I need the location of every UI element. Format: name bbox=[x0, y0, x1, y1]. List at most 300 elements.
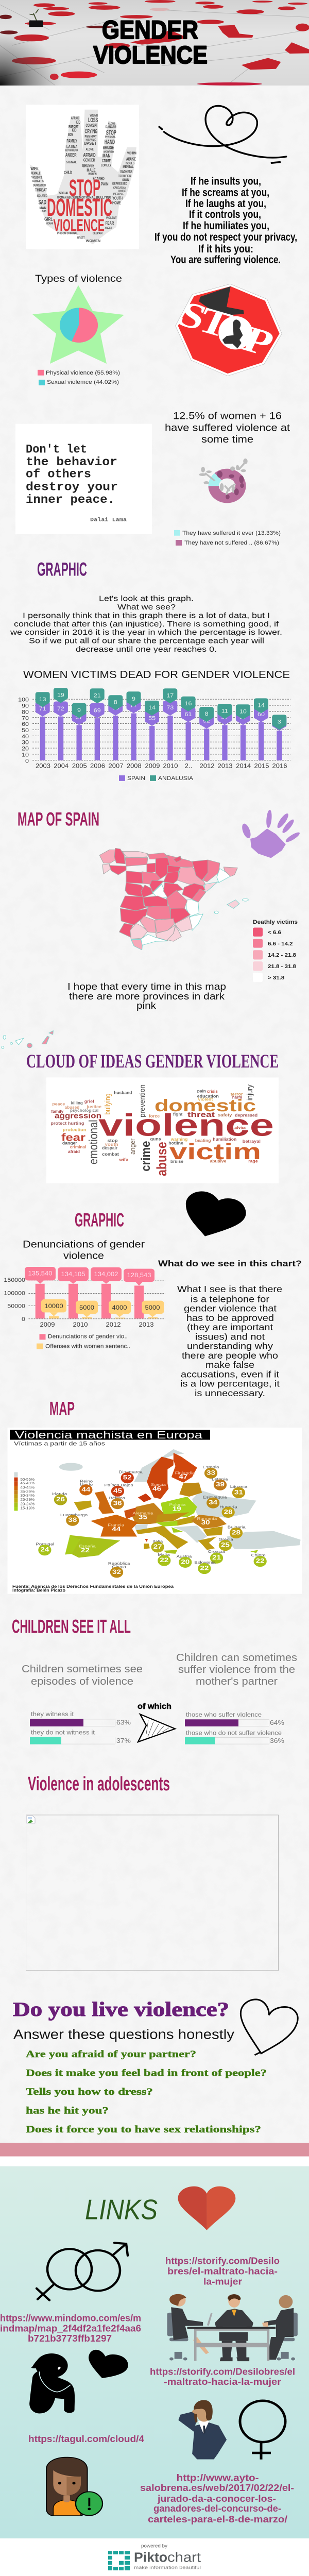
grid and y axis: 90 bbox=[22, 702, 29, 709]
chart title: violence bbox=[63, 1250, 104, 1261]
panel: women victims chart bbox=[18, 669, 290, 782]
panel: stop domestic violence hand word cloud: GIRL bbox=[44, 217, 53, 222]
country labels and value bubbles: Eslovaquia bbox=[203, 1495, 227, 1499]
panel: stop domestic violence hand word cloud: ABUSE bbox=[126, 157, 136, 162]
panel: word cloud: peace bbox=[52, 1101, 65, 1106]
text block: children see bbox=[22, 1664, 143, 1687]
link: mindomo bbox=[0, 2313, 141, 2344]
Andalusia values bbox=[39, 691, 281, 725]
icon: stop sign with boot and kneeling figure: S bbox=[172, 294, 213, 338]
panel: stop domestic violence hand word cloud: VICTIM bbox=[127, 150, 136, 155]
panel: stop domestic violence hand word cloud: WOMEN bbox=[85, 240, 100, 243]
panel: word cloud: abuse bbox=[154, 1142, 169, 1176]
panel: Europe violence map: Grecia bbox=[219, 1537, 233, 1541]
grid and y axis: 50000 bbox=[7, 1302, 25, 1309]
panel: stop domestic violence hand word cloud: FEMALE bbox=[31, 171, 41, 175]
x axis labels: 2012 bbox=[106, 1321, 121, 1328]
panel: word cloud: psychological bbox=[70, 1108, 98, 1113]
panel: stop domestic violence hand word cloud: ANGER bbox=[105, 226, 112, 230]
question list: Does it force you to have sex relationships? bbox=[26, 2124, 261, 2135]
panel: stop domestic violence hand word cloud: KID bbox=[76, 120, 80, 125]
link: mindomo: indmap/map_2f4df2a1fe2f4aa6 bbox=[0, 2324, 141, 2334]
panel: stop domestic violence hand word cloud: VIOLENT bbox=[106, 216, 117, 220]
pink divider band bbox=[0, 2143, 309, 2157]
panel: stop domestic violence hand word cloud: SADNESS bbox=[120, 170, 132, 175]
panel: word cloud: afraid bbox=[68, 1149, 80, 1154]
text block: map hope: I hope that every time in this map bbox=[67, 981, 226, 992]
panel: word cloud: grief bbox=[84, 1099, 95, 1104]
offense values bbox=[44, 1303, 160, 1311]
panel: stop domestic violence hand word cloud: DESPAIR bbox=[93, 232, 102, 235]
grid and y axis: 10 bbox=[22, 751, 29, 758]
panel: stop domestic violence hand word cloud: GENDER bbox=[83, 158, 95, 163]
panel: Europe violence map: 38 bbox=[68, 1516, 77, 1523]
panel: word cloud: victim bbox=[169, 1139, 261, 1164]
panel: stop domestic violence hand word cloud: WOMEN bbox=[88, 172, 97, 176]
panel: word cloud: violent bbox=[198, 1097, 213, 1101]
panel: stop domestic violence hand word cloud: YOUNG bbox=[90, 113, 98, 117]
grid and y axis: 150000 bbox=[4, 1277, 25, 1283]
legend: ANDALUSIA bbox=[158, 775, 193, 782]
panel: word cloud: justice bbox=[86, 1105, 101, 1109]
legend scale: 45-49% bbox=[20, 1481, 35, 1485]
map legend: deathly victims: 6.6 - 14.2 bbox=[268, 941, 293, 947]
panel: word cloud bbox=[46, 1077, 279, 1183]
icon: red heart bbox=[178, 2187, 235, 2230]
link: tagul: https://tagul.com/cloud/4 bbox=[28, 2434, 144, 2445]
Spain bars bbox=[36, 698, 286, 760]
panel: Europe violence map: 30 bbox=[201, 1518, 210, 1526]
panel: Europe violence map: 44 bbox=[112, 1525, 121, 1532]
map legend: deathly victims: 21.8 - 31.8 bbox=[268, 963, 296, 970]
panel: stop domestic violence hand word cloud: SOCIAL bbox=[59, 191, 69, 195]
map source: Infografía: Belén Picazo bbox=[12, 1588, 65, 1593]
panel: word cloud: anger bbox=[129, 1139, 136, 1155]
country labels and value bubbles: 52 bbox=[123, 1473, 132, 1481]
x axis labels: 2004 bbox=[54, 762, 68, 769]
panel: stop domestic violence hand word cloud: ALONE bbox=[85, 147, 94, 151]
Europe countries bbox=[59, 1449, 301, 1558]
title: Gender Violence: VIOLENCE bbox=[93, 41, 208, 69]
link: storify two bbox=[150, 2367, 295, 2387]
heading: what do we see: What do we see in this chart? bbox=[158, 1259, 302, 1268]
icon: stop sign with boot and kneeling figure: P bbox=[236, 319, 280, 364]
panel: stop domestic violence hand word cloud: VIOLENCE bbox=[31, 175, 42, 179]
grid and y axis: 70 bbox=[22, 715, 29, 721]
Balearic Islands bbox=[214, 899, 248, 914]
x axis labels: 2013 bbox=[139, 1321, 154, 1328]
panel: stop domestic violence hand word cloud: PRISON CRIMINAL bbox=[57, 232, 78, 235]
Spain values: 61 bbox=[185, 711, 192, 718]
panel: word cloud: fear bbox=[61, 1132, 85, 1143]
icon: black heart bbox=[186, 1191, 246, 1236]
icon: black heart small bbox=[89, 2350, 128, 2378]
grid and y axis: 100000 bbox=[4, 1290, 25, 1297]
panel: Europe violence map bbox=[7, 1428, 302, 1594]
panel: donut chart with branches bbox=[174, 459, 281, 546]
denunciation values: 128,543 bbox=[127, 1272, 151, 1279]
x axis labels: 2012 bbox=[200, 762, 215, 769]
panel: stop domestic violence hand word cloud: GRUNGE bbox=[82, 164, 94, 168]
Andalusia values: 14 bbox=[258, 702, 265, 709]
x axis labels: 2009 bbox=[40, 1321, 55, 1328]
panel: stop domestic violence hand word cloud bbox=[26, 105, 139, 249]
Spain values: 55 bbox=[148, 715, 156, 721]
panel: stop domestic violence hand word cloud: CHINESE bbox=[118, 190, 126, 193]
panel: stop domestic violence hand word cloud: ALONE bbox=[108, 122, 115, 125]
map legend: deathly victims: < 6.6 bbox=[268, 930, 281, 936]
bars: suffer: 36% bbox=[270, 1737, 284, 1744]
country labels and value bubbles: Estonia bbox=[203, 1465, 219, 1469]
heading: map: MAP bbox=[49, 1398, 75, 1419]
country labels and value bubbles: 47 bbox=[179, 1473, 188, 1480]
country labels and value bubbles: Hungría bbox=[220, 1505, 237, 1509]
panel: word cloud: wife bbox=[119, 1157, 128, 1162]
panel: header photo bbox=[0, 0, 309, 86]
legend: Denunciations of gender vio.. bbox=[48, 1333, 128, 1340]
text block: chart opinion: (they are important bbox=[187, 1323, 273, 1332]
x axis labels: 2010 bbox=[163, 762, 178, 769]
panel: Dalai Lama quote bbox=[15, 424, 152, 534]
panel: stop domestic violence hand word cloud: LONELY bbox=[101, 163, 112, 167]
country labels and value bubbles: 33 bbox=[207, 1469, 215, 1476]
text block: chart opinion: has to be approved bbox=[186, 1313, 274, 1323]
panel: stop domestic violence hand word cloud: TERRIFIED bbox=[118, 174, 131, 178]
question list: Tells you how to dress? bbox=[26, 2087, 153, 2097]
text block: warning poem: If he screams at you, bbox=[182, 186, 269, 198]
Andalusia values: 8 bbox=[205, 710, 209, 717]
chart title: Types of violence bbox=[35, 273, 122, 284]
panel: Europe violence map: Eslovenia bbox=[194, 1560, 216, 1565]
icon: stop sign with boot and kneeling figure: T bbox=[192, 300, 237, 346]
text block: warning poem: If he humiliates you, bbox=[183, 219, 269, 232]
panel: stop domestic violence hand word cloud: PHYSICAL bbox=[105, 135, 116, 139]
text block: chart opinion: there are people who bbox=[182, 1351, 278, 1361]
Andalusia values: 13 bbox=[39, 696, 46, 703]
panel: Europe violence map: 28 bbox=[232, 1529, 241, 1536]
panel: stop domestic violence hand word cloud: LOSS bbox=[41, 210, 46, 213]
panel: stop domestic violence hand word cloud: ISOLATED bbox=[37, 193, 47, 198]
text block: chart opinion: understanding why bbox=[187, 1341, 273, 1351]
panel: stop domestic violence hand word cloud: UPSET bbox=[84, 141, 97, 146]
grid and y axis: 20 bbox=[22, 745, 29, 752]
text block: chart opinion: is unnecessary. bbox=[195, 1388, 265, 1398]
x axis labels: 2005 bbox=[72, 762, 87, 769]
text block: chart opinion: gender violence that bbox=[184, 1303, 277, 1313]
Spain values: 57 bbox=[239, 714, 247, 720]
Andalusia values: 10 bbox=[239, 708, 247, 715]
panel: word cloud: criminal bbox=[70, 1145, 86, 1149]
heading: graphic two: GRAPHIC bbox=[75, 1209, 124, 1231]
Andalusia values: 8 bbox=[114, 699, 117, 705]
panel: stop domestic violence hand word cloud: DEPRESSED bbox=[112, 182, 127, 185]
star background bbox=[32, 285, 124, 364]
panel: stop domestic violence hand word cloud: HISPANIC bbox=[85, 139, 96, 142]
x axis labels: 2009 bbox=[145, 762, 160, 769]
panel: word cloud: pain bbox=[197, 1089, 206, 1093]
legend: Sexual violemce (44.02%) bbox=[47, 379, 119, 385]
Andalusia values: 14 bbox=[148, 704, 156, 711]
panel: stop domestic violence hand word cloud: DANGER bbox=[106, 125, 116, 129]
panel: word cloud: bullying bbox=[104, 1093, 112, 1114]
text block: warning poem: If it hits you: bbox=[198, 243, 253, 255]
panel: Europe violence map: Checa bbox=[112, 1564, 126, 1569]
panel: Dalai Lama quote: inner peace. bbox=[26, 494, 115, 507]
text block: map hope: pink bbox=[136, 1001, 156, 1011]
map legend: deathly victims: 14.2 - 21.8 bbox=[268, 952, 296, 958]
panel: word cloud: injury bbox=[246, 1084, 254, 1100]
map source: Fuente: Agencia de los Derechos Fundamentales de la Unión Europea bbox=[12, 1584, 174, 1589]
grid and y axis: 80 bbox=[22, 708, 29, 715]
panel: word cloud: force bbox=[149, 1114, 160, 1118]
Spain values: 72 bbox=[57, 705, 64, 712]
link: storify one: la-mujer bbox=[203, 2277, 243, 2287]
panel: word cloud: depressed bbox=[235, 1113, 258, 1117]
panel: stop domestic violence hand word cloud: MALE bbox=[87, 168, 96, 173]
text block: graph commentary: What we see? bbox=[117, 603, 176, 612]
text block: chart opinion: issues) and not bbox=[195, 1332, 265, 1342]
denunciation values bbox=[28, 1270, 151, 1279]
Spain values: 48 bbox=[276, 719, 283, 726]
question list bbox=[26, 2049, 267, 2135]
panel: word cloud: crisis bbox=[207, 1089, 218, 1094]
Andalusia values: 19 bbox=[57, 691, 64, 698]
country labels and value bubbles: 36 bbox=[113, 1499, 122, 1506]
map legend: deathly victims: > 31.8 bbox=[268, 975, 284, 981]
icon: stop sign with boot and kneeling figure: O bbox=[211, 309, 261, 357]
offense values: 4000 bbox=[112, 1304, 127, 1311]
country labels and value bubbles: Suecia bbox=[151, 1482, 166, 1487]
panel: stop domestic violence hand word cloud: WOMAN ABUSED bbox=[57, 195, 77, 199]
wordmark: chart bbox=[167, 2550, 201, 2565]
panel: stop domestic violence hand word cloud: ANGER bbox=[65, 152, 77, 158]
panel: stop domestic violence hand word cloud: LOSS bbox=[88, 116, 98, 124]
panel: word cloud: warning bbox=[170, 1137, 188, 1142]
panel: stop domestic violence hand word cloud: YOUTH bbox=[112, 196, 123, 200]
legend: SPAIN bbox=[127, 775, 145, 782]
panel: Dalai Lama quote: Don't let bbox=[26, 443, 87, 456]
panel: missing image frame bbox=[26, 1815, 278, 1971]
panel: Europe violence map: Croacia bbox=[208, 1549, 225, 1554]
panel: Europe violence map: Luxemburgo bbox=[60, 1513, 88, 1517]
panel: word cloud: despair bbox=[102, 1146, 117, 1150]
heading: do you live violence: Do you live violence? bbox=[13, 1998, 229, 2020]
panel: word cloud: abusive bbox=[210, 1159, 226, 1163]
map source bbox=[12, 1584, 174, 1593]
country labels and value bubbles: Finlandia bbox=[175, 1470, 195, 1475]
link: storify one: bres/el-maltrato-hacia- bbox=[167, 2266, 278, 2277]
panel: denunciations chart bbox=[4, 1239, 165, 1350]
panel: Europe violence map: España bbox=[79, 1544, 96, 1549]
Spain values: 52 bbox=[203, 717, 210, 724]
panel: word cloud: rage bbox=[248, 1159, 258, 1163]
icon: linked gender symbols bbox=[37, 2243, 128, 2300]
link: ayto salobrena: carteles-para-el-8-de-marzo/ bbox=[148, 2515, 288, 2525]
Spain values: 69 bbox=[94, 707, 101, 714]
panel: stop domestic violence hand word cloud: CONCEPT bbox=[85, 123, 98, 128]
legend scale bbox=[14, 1472, 35, 1511]
panel: stop domestic violence hand word cloud: DOMESTIC bbox=[32, 180, 44, 183]
Andalusia values: 16 bbox=[185, 700, 192, 707]
x axis labels: 2015 bbox=[254, 762, 269, 769]
offense values: 5000 bbox=[79, 1304, 94, 1311]
country labels and value bubbles: 26 bbox=[56, 1496, 65, 1503]
panel: word cloud: combat bbox=[102, 1152, 119, 1157]
icon: stop sign with boot and kneeling figure bbox=[172, 284, 282, 376]
text block: chart opinion: What I see is that there bbox=[177, 1284, 282, 1294]
panel: Dalai Lama quote: the behavior bbox=[26, 456, 117, 469]
legend: Physical violence (55.98%) bbox=[46, 369, 120, 376]
x axis labels: 2008 bbox=[127, 762, 142, 769]
panel: word cloud: education bbox=[197, 1094, 219, 1098]
panel: word cloud: threat bbox=[187, 1111, 215, 1119]
Andalusia bubbles bbox=[36, 688, 286, 730]
chart title: Denunciations of gender bbox=[23, 1239, 145, 1250]
panel: stop domestic violence hand word cloud: DEPRESSION bbox=[33, 184, 46, 188]
link: ayto salobrena: http://www.ayto- bbox=[176, 2473, 259, 2484]
bars: suffer: 64% bbox=[270, 1719, 284, 1726]
map legend: deathly victims: Deathly victims bbox=[253, 919, 298, 925]
bars: witness: 37% bbox=[116, 1737, 131, 1744]
x axis labels: 2010 bbox=[73, 1321, 88, 1328]
panel: stop domestic violence hand word cloud: PAIN bbox=[101, 182, 108, 187]
panel: stop domestic violence hand word cloud: AFRAID bbox=[83, 152, 96, 158]
panel: stop domestic violence hand word cloud: MAN bbox=[40, 206, 46, 210]
wordmark: Pikto bbox=[134, 2550, 167, 2565]
text block: map hope: there are more provinces in dark bbox=[69, 991, 225, 1002]
arrow: hatched arrowhead bbox=[138, 1714, 175, 1742]
panel: links section bbox=[0, 2166, 309, 2538]
subheading: answer honestly: Answer these questions honestly bbox=[13, 2027, 235, 2042]
panel: Europe violence map: 24 bbox=[40, 1546, 49, 1553]
panel: Europe violence map: Alemania bbox=[133, 1511, 153, 1515]
x axis labels: 2007 bbox=[109, 762, 124, 769]
map of Spain by province bbox=[2, 848, 248, 1048]
grid and y axis: 40 bbox=[22, 733, 29, 740]
Spain values: 60 bbox=[258, 711, 265, 718]
text block: 12.5% of women: 12.5% of women + 16 bbox=[173, 411, 282, 421]
panel: Europe violence map: Portugal bbox=[36, 1541, 54, 1546]
panel: stop domestic violence hand word cloud: SIGNAL bbox=[66, 160, 77, 164]
country labels and value bubbles: Reino bbox=[80, 1479, 93, 1483]
panel: Europe violence map: Chipre bbox=[251, 1553, 266, 1557]
text block: graph commentary: So if we put all of our share the percentage each year will bbox=[29, 637, 264, 645]
Andalusia values: 9 bbox=[77, 706, 81, 714]
tagline: make information beautiful bbox=[134, 2565, 201, 2570]
Spain values bbox=[39, 702, 283, 726]
legend bbox=[174, 529, 281, 546]
panel: stop domestic violence hand word cloud: KID bbox=[72, 128, 77, 132]
link: ayto salobrena: jurado-da-a-conocer-los- bbox=[157, 2494, 276, 2504]
link: ayto salobrena: salobrena.es/web/2017/02/22/el- bbox=[140, 2483, 294, 2494]
panel: stop domestic violence hand word cloud: HAND bbox=[105, 138, 115, 145]
panel: stop domestic violence hand word cloud: BRUISE bbox=[103, 145, 114, 150]
country labels and value bubbles: Irlanda bbox=[52, 1492, 67, 1496]
panel: stop domestic violence hand word cloud: MENTAL bbox=[123, 164, 133, 169]
Canary Islands bbox=[2, 1030, 53, 1048]
map title bar: Violencia machista en Europa bbox=[15, 1430, 202, 1441]
panel: stop domestic violence hand word cloud: CRIME bbox=[102, 159, 111, 163]
panel: stop domestic violence hand word cloud: STOP bbox=[69, 175, 100, 201]
panel: stop domestic violence hand word cloud: AFRAID bbox=[71, 116, 79, 120]
branches bbox=[199, 459, 248, 499]
country labels and value bubbles: 45 bbox=[113, 1487, 122, 1494]
panel: stop domestic violence hand word cloud: ISSUES bbox=[126, 161, 134, 165]
panel: stop domestic violence hand word cloud: EMOTIONAL bbox=[77, 195, 96, 199]
legend scale: 50-55% bbox=[20, 1477, 35, 1482]
text block: graph commentary: conclude that after this (an injustice). There is something good, if bbox=[14, 620, 279, 629]
panel: stop domestic violence hand word cloud: SAD bbox=[39, 198, 46, 206]
panel: Dalai Lama quote: of others bbox=[26, 468, 91, 481]
icon: purple handprint bbox=[241, 810, 301, 858]
offense values: 5000 bbox=[145, 1304, 160, 1311]
Spain values: 57 bbox=[221, 714, 229, 720]
panel: stop domestic violence hand word cloud: CHILD bbox=[64, 170, 72, 175]
heading: links: LINKS bbox=[85, 2194, 158, 2226]
panel: stop domestic violence hand word cloud: LATINA bbox=[66, 144, 78, 149]
panel: Europe violence map: Bulgaria bbox=[228, 1525, 246, 1529]
panel: Europe violence map: 35 bbox=[139, 1513, 147, 1520]
text block: warning poem bbox=[154, 175, 297, 266]
legend bbox=[119, 775, 193, 782]
panel: word cloud: advice bbox=[233, 1125, 246, 1130]
country labels and value bubbles: 46 bbox=[152, 1485, 161, 1492]
panel: stop domestic violence hand word cloud: CRYING bbox=[85, 128, 97, 134]
country labels and value bubbles: Bélgica bbox=[109, 1496, 125, 1500]
Andalusia values: 21 bbox=[94, 692, 101, 699]
panel: stop domestic violence hand word cloud: MAN bbox=[102, 153, 110, 159]
panel: word cloud: harm bbox=[232, 1095, 242, 1099]
grid and y axis bbox=[18, 696, 290, 764]
heading: Graphic: GRAPHIC bbox=[37, 558, 87, 580]
illustration: meeting at a table bbox=[167, 2294, 298, 2361]
country labels and value bubbles bbox=[52, 1465, 247, 1518]
denunciation values: 134,002 bbox=[94, 1271, 118, 1278]
text block: graph commentary bbox=[10, 595, 282, 654]
icon: girl with warning badge bbox=[46, 2458, 102, 2516]
x axis labels bbox=[36, 762, 287, 769]
Andalusia values: 17 bbox=[166, 692, 174, 699]
question list: has he hit you? bbox=[26, 2105, 109, 2116]
panel: stop domestic violence hand word cloud: BULLYING bbox=[96, 195, 111, 199]
text block: graph commentary: we consider in 2016 it is the year in which the percentage is lower. bbox=[10, 629, 282, 637]
country labels and value bubbles: 31 bbox=[234, 1488, 243, 1496]
text block: children suffer: Children can sometimes bbox=[176, 1652, 297, 1664]
text block: chart opinion: make false bbox=[205, 1360, 254, 1370]
panel: word cloud: guns bbox=[150, 1137, 161, 1141]
panel: stop domestic violence hand word cloud: BOY bbox=[68, 132, 73, 137]
panel: stop domestic violence hand word cloud: THREAT bbox=[35, 188, 47, 192]
link: mindomo: https://www.mindomo.com/es/m bbox=[0, 2313, 141, 2324]
text block: graph commentary: decrease until one year reaches 0. bbox=[76, 646, 217, 654]
text block: children suffer: mother's partner bbox=[196, 1676, 278, 1687]
Spain values: 73 bbox=[112, 704, 119, 711]
link: ayto salobrena bbox=[140, 2473, 294, 2525]
grid and y axis: 0 bbox=[22, 1315, 25, 1323]
panel: stop domestic violence hand word cloud: FAMILY bbox=[66, 139, 77, 144]
country labels and value bubbles: Letonia bbox=[212, 1477, 228, 1481]
panel: Europe violence map: República bbox=[108, 1561, 130, 1566]
panel: word cloud: aggression bbox=[55, 1112, 101, 1121]
country labels and value bubbles: Dinamarca bbox=[119, 1469, 143, 1474]
panel: word cloud: fight bbox=[173, 1112, 182, 1116]
panel: stop domestic violence hand word cloud: VIOLENCE bbox=[53, 216, 105, 235]
Andalusia values: 11 bbox=[221, 707, 228, 714]
x axis labels: 2.. bbox=[185, 762, 192, 769]
text block: chart opinion: is a telephone for bbox=[191, 1294, 269, 1304]
link: mindomo: b721b3773ffb1297 bbox=[28, 2334, 112, 2344]
panel: Europe violence map: Italia bbox=[152, 1539, 163, 1544]
